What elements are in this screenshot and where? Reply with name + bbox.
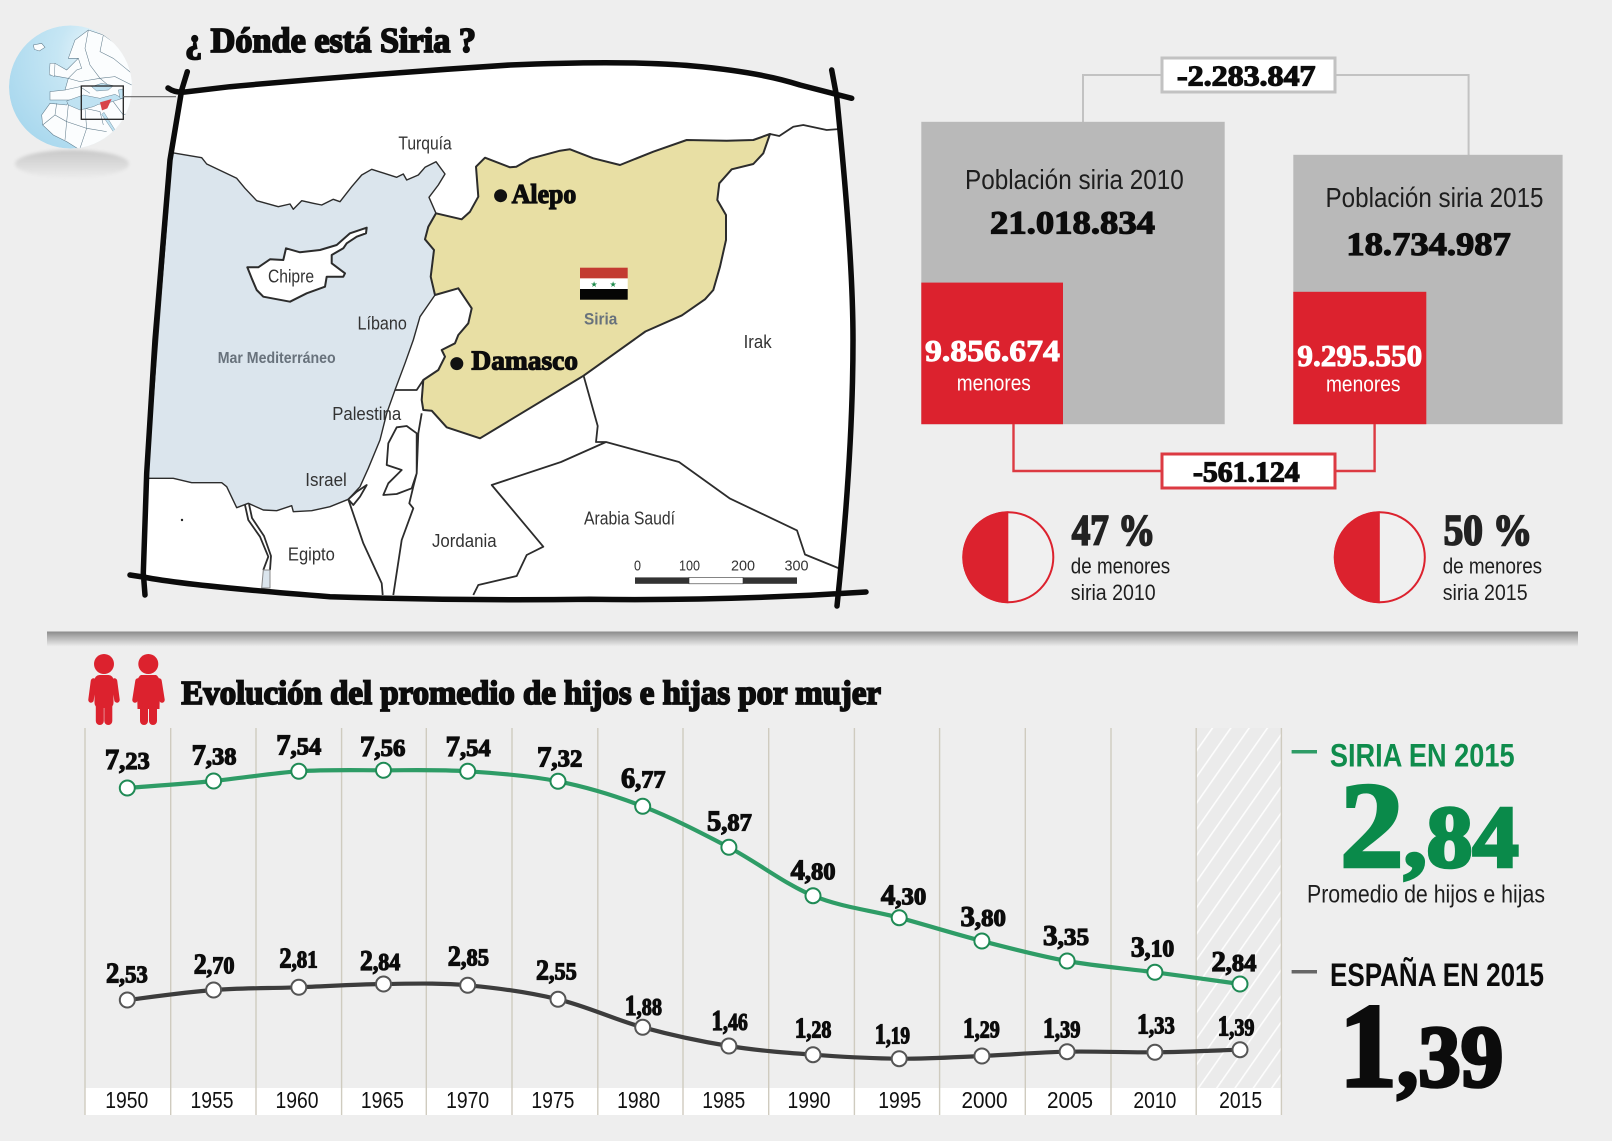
value labels: España: 1,46 (712, 1006, 748, 1037)
hand-drawn map frame (130, 63, 866, 606)
stat: 47% minors 2010: siria 2010 (1071, 580, 1156, 605)
callout: España 2015: 1,39 (1339, 979, 1503, 1112)
value labels: España: 2,85 (448, 942, 489, 973)
value labels: España: 1,19 (875, 1019, 910, 1050)
value labels: España: 2,70 (194, 949, 234, 980)
callout: Siria 2015: Promedio de hijos e hijas (1307, 880, 1545, 908)
year axis labels: 2015 (1219, 1087, 1262, 1113)
connector: total population difference (1083, 58, 1469, 155)
minors 2010: menores (957, 370, 1031, 396)
panel: globe locator (9, 26, 176, 178)
map labels: Israel (305, 469, 347, 490)
icon: boy and girl (91, 654, 162, 721)
map labels: Mar Mediterráneo (218, 350, 336, 367)
year axis labels: 2010 (1133, 1087, 1176, 1113)
year axis labels (105, 1087, 1262, 1113)
value labels: España: 1,33 (1137, 1009, 1175, 1040)
year axis labels: 2000 (962, 1087, 1008, 1113)
year axis labels: 1990 (788, 1087, 830, 1113)
icon: Syrian flag: ★ (590, 280, 598, 289)
year axis labels: 1970 (446, 1087, 489, 1113)
panel: population 2015 (1293, 155, 1563, 424)
map labels: Chipre (268, 265, 314, 286)
map scale bar: 0 (634, 558, 641, 574)
map scale bar: 100 (679, 558, 700, 574)
year axis labels: 1995 (878, 1087, 921, 1113)
panel: population 2015: Población siria 2015 (1326, 182, 1544, 213)
title: Dónde está Siria: ¿ Dónde está Siria ? (185, 21, 476, 60)
stat: 50% minors 2015: 50 % (1444, 508, 1532, 555)
globe shadow (15, 150, 129, 178)
value labels: Siria: 7,56 (360, 732, 405, 763)
stat: 50% minors 2015 (1334, 508, 1542, 605)
map labels (218, 132, 772, 564)
value labels: España: 1,88 (625, 991, 662, 1022)
callout: Siria 2015: 2,84 (1340, 759, 1519, 894)
map scale bar: 300 (784, 558, 808, 574)
line chart: children per woman (85, 728, 1281, 1115)
value labels: Siria: 3,80 (960, 902, 1006, 933)
panel: population 2015: 18.734.987 (1346, 227, 1511, 263)
connector: minors difference (1014, 424, 1375, 489)
map of Syria (130, 63, 866, 606)
value labels: Siria: 3,10 (1131, 933, 1174, 964)
value labels: Siria: 4,80 (791, 855, 836, 886)
value labels: España: 2,53 (106, 959, 148, 990)
minors 2015: menores (1326, 372, 1400, 397)
value labels: Siria: 3,35 (1043, 921, 1089, 952)
value labels: Siria: 7,54 (276, 730, 321, 761)
locator box (81, 86, 123, 119)
connector: minors difference: -561.124 (1193, 458, 1300, 489)
value labels: España: 2,81 (279, 944, 318, 975)
value labels: Siria (105, 730, 1256, 978)
map labels: Irak (744, 331, 772, 352)
value labels: Siria: 7,38 (192, 740, 236, 771)
map labels: Arabia Saudí (584, 507, 676, 528)
borders (245, 125, 843, 595)
globe (9, 26, 133, 152)
panel: population 2010 (921, 122, 1225, 424)
year axis labels: 1985 (702, 1087, 745, 1113)
value labels: España: 1,39 (1043, 1014, 1080, 1045)
map labels: Jordania (432, 530, 497, 551)
value labels: España: 1,29 (963, 1013, 1000, 1044)
minors 2010: 9.856.674 (925, 333, 1060, 368)
panel: population 2010: Población siria 2010 (965, 164, 1184, 195)
value labels: Siria: 7,23 (105, 745, 150, 776)
panel: population 2010: 21.018.834 (990, 206, 1155, 242)
value labels: Siria: 7,54 (446, 732, 491, 763)
map labels: Turquía (398, 132, 452, 154)
value labels: Siria: 6,77 (621, 763, 666, 794)
callout: Siria 2015 (1292, 738, 1545, 908)
callout: España 2015: ESPAÑA EN 2015 (1330, 957, 1544, 993)
stat: 50% minors 2015: siria 2015 (1443, 580, 1528, 605)
map scale bar: 200 (731, 558, 755, 574)
value labels: España: 1,39 (1218, 1012, 1254, 1043)
heading: fertility evolution: Evolución del promedio de hijos e hijas por mujer (181, 675, 881, 712)
year axis labels: 1950 (105, 1087, 148, 1113)
value labels: Siria: 7,32 (537, 743, 582, 774)
value labels: Siria: 4,30 (881, 880, 926, 911)
icon: Syrian flag (580, 268, 628, 300)
icon: Syrian flag: ★ (610, 280, 617, 289)
year axis labels: 1980 (617, 1087, 660, 1113)
year axis labels: 1960 (276, 1087, 318, 1113)
minors 2015: 9.295.550 (1297, 338, 1422, 373)
stat: 47% minors 2010: de menores (1071, 553, 1170, 578)
year axis labels: 1965 (361, 1087, 404, 1113)
map labels: Siria (584, 310, 618, 329)
city: Alepo: Alepo (512, 179, 576, 209)
callout: Siria 2015: SIRIA EN 2015 (1330, 738, 1515, 774)
map scale bar (634, 558, 808, 584)
year axis labels: 1955 (190, 1087, 234, 1113)
locator line (123, 96, 176, 98)
value labels: Siria: 2,84 (1212, 947, 1256, 978)
value labels: España: 2,55 (536, 955, 577, 986)
callout: España 2015 (1292, 957, 1544, 1112)
minors 2015 (1293, 292, 1426, 424)
value labels: España: 2,84 (360, 946, 400, 977)
stat: 47% minors 2010: 47 % (1072, 508, 1155, 555)
stat: 47% minors 2010 (962, 508, 1170, 605)
value labels: Siria: 5,87 (707, 807, 752, 838)
Syria territory (422, 134, 770, 438)
map labels: Líbano (358, 312, 407, 334)
connector: total population difference: -2.283.847 (1177, 62, 1316, 92)
stat: 50% minors 2015: de menores (1443, 553, 1542, 578)
Cyprus (247, 228, 367, 302)
year axis labels: 1975 (531, 1087, 574, 1113)
series line: España (120, 976, 1247, 1066)
series line: Siria (120, 763, 1247, 992)
year axis labels: 2005 (1047, 1087, 1093, 1113)
value labels: España: 1,28 (795, 1013, 831, 1044)
city: Damasco: Damasco (471, 346, 578, 376)
map labels: Egipto (288, 544, 335, 564)
value labels: España (106, 942, 1254, 1050)
minors 2010 (921, 283, 1063, 424)
map labels: Palestina (332, 403, 402, 424)
